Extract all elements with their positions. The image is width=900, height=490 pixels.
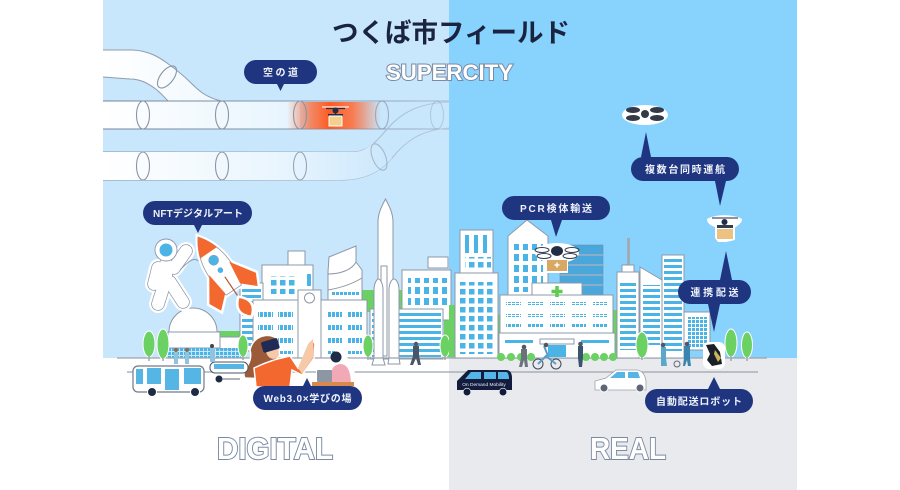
label: 連携配送: 連携配送 (690, 286, 738, 299)
label: PCR検体輸送: PCR検体輸送 (520, 202, 592, 215)
label: 空の道: 空の道 (263, 66, 298, 79)
vehicle: On Demand Mobility van (457, 370, 512, 396)
label: Web3.0×学びの場: Web3.0×学びの場 (264, 392, 352, 405)
label: 自動配送ロボット (645, 377, 753, 413)
icon: middle delivery drone (707, 215, 742, 242)
vehicle: autonomous bus (133, 366, 204, 396)
vehicle: On Demand Mobility van: On Demand Mobility (462, 382, 506, 388)
label: 自動配送ロボット: 自動配送ロボット (656, 395, 742, 408)
label: PCR検体輸送 (502, 196, 610, 237)
rocket on launch pad (372, 199, 400, 365)
ground lines (117, 358, 767, 372)
icon: PCR specimen drone (535, 243, 579, 273)
pedestrians: digital side (174, 342, 421, 365)
illustration: woman with VR goggles (244, 335, 315, 387)
icon: delivery drone in sky road (322, 107, 349, 126)
vehicle: white car (595, 370, 646, 392)
tube rings around orange section (294, 101, 388, 129)
heading: REAL: REAL (590, 431, 666, 466)
building: school with clock tower (253, 290, 367, 358)
icon: top multi-flight drone (622, 105, 668, 125)
highlighted orange tube section (287, 102, 381, 129)
building: planetarium dome (165, 308, 242, 358)
label: NFTデジタルアート: NFTデジタルアート (153, 207, 243, 220)
label: 複数台同時運航 (631, 132, 739, 206)
building: pointed tower and glass tower (508, 220, 603, 297)
icon: autonomous delivery robot (703, 342, 725, 369)
green hills behind real buildings (449, 305, 640, 357)
background: digital ground (103, 358, 449, 490)
illustration: rocket (175, 221, 275, 332)
background: real sky (449, 0, 797, 358)
building: real tower left (455, 230, 498, 358)
pedestrians and cyclist: real side (519, 342, 691, 369)
building: right digital office and stripes (370, 257, 451, 359)
label: 空の道 (244, 60, 317, 91)
title: つくば市フィールド (332, 18, 570, 48)
building: hospital (497, 283, 617, 361)
trees: digital side (143, 329, 450, 361)
buildings: right towers (617, 238, 710, 358)
sky road tubes (103, 50, 449, 180)
label: 連携配送 (678, 251, 751, 332)
building: digital office cluster (240, 246, 362, 351)
label: Web3.0×学びの場 (253, 378, 362, 410)
trees: real side (636, 329, 752, 361)
heading: DIGITAL: DIGITAL (217, 431, 333, 466)
illustration: student with laptop (312, 350, 356, 386)
label: 複数台同時運航: 複数台同時運航 (645, 163, 725, 176)
illustration: astronaut (154, 239, 206, 304)
green hills behind digital buildings (218, 290, 458, 357)
background: digital sky (103, 0, 449, 358)
subtitle: SUPERCITY: SUPERCITY (386, 60, 513, 85)
label: NFTデジタルアート (143, 201, 252, 233)
background: real ground (449, 358, 797, 490)
vehicle: personal mobility behind (210, 362, 248, 382)
